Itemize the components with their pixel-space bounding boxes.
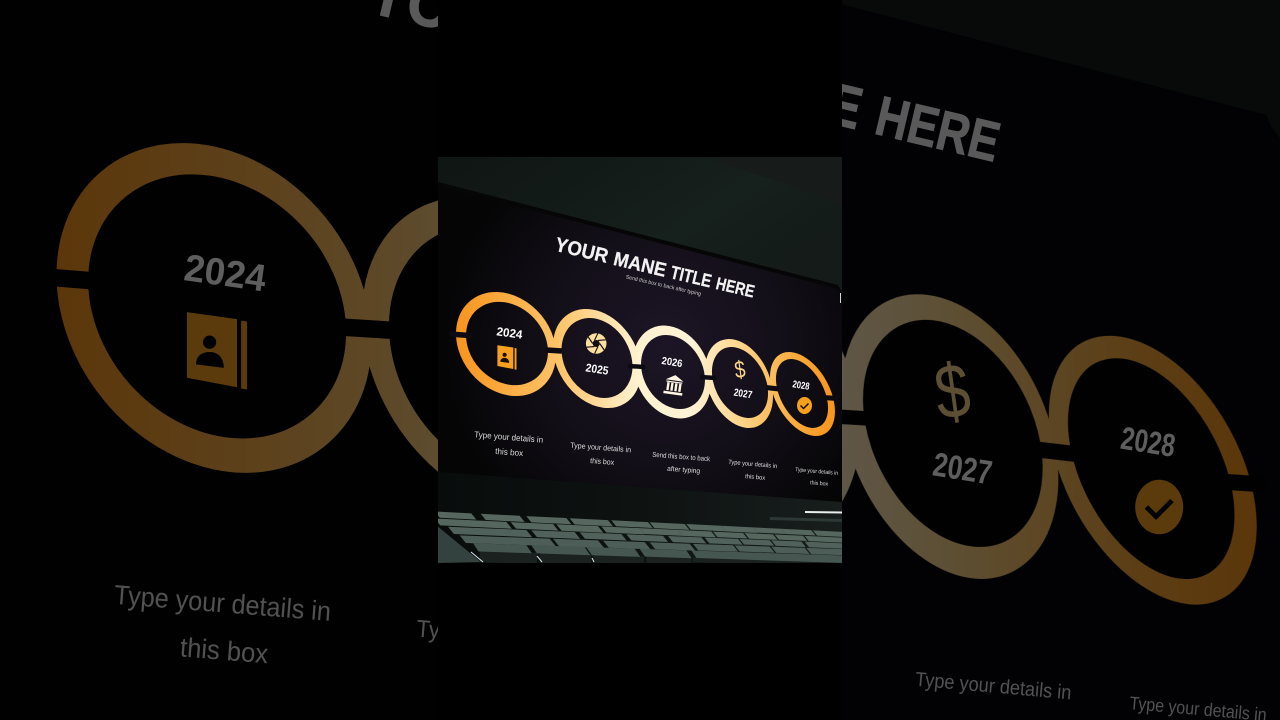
year 2027: 2027 [733, 387, 753, 401]
screen [490, 213, 842, 496]
icon: check badge [797, 397, 812, 414]
bezel upper right panel [702, 157, 842, 205]
screen edge glint [840, 293, 841, 303]
year 2026: 2026 [661, 355, 683, 370]
detail text 4: Type your details in [728, 459, 778, 470]
detail text 2: this box [590, 456, 615, 467]
detail text 1: this box [495, 446, 524, 458]
title: YOUR [553, 234, 611, 268]
panel: blurred enlarged left background [56, 0, 438, 664]
subtitle: Send this box to back after typing [625, 274, 701, 298]
title: MANE [611, 248, 668, 282]
panel: blurred enlarged right background: TITLE [724, 46, 869, 142]
year 2025: 2025 [585, 362, 610, 378]
detail text 3: after typing [667, 466, 700, 475]
panel: blurred enlarged right background: Type your details in [914, 669, 1072, 704]
icon: camera aperture [586, 333, 606, 354]
year 2028: 2028 [792, 379, 810, 393]
panel: blurred enlarged right background: $ [929, 346, 975, 436]
keyboard white edge glints [471, 552, 594, 562]
title: TITLE [669, 261, 714, 291]
detail text 3 [652, 452, 711, 475]
panel: blurred enlarged right background: 2028 [1118, 420, 1178, 464]
detail text 5: Type your details in [795, 467, 838, 477]
laptop top bezel [438, 157, 842, 292]
icon: dollar sign: $ [733, 355, 747, 384]
detail text 1: Type your details in [474, 429, 544, 445]
detail text 4: this box [745, 473, 766, 482]
icon: contact book [497, 345, 516, 370]
detail text 5 [795, 467, 838, 488]
panel: blurred enlarged left background: 2024 [182, 247, 269, 300]
panel: blurred enlarged left background: Type your details in [415, 615, 609, 658]
detail text 4 [728, 460, 777, 480]
panel: central laptop photo [430, 157, 850, 574]
rings [456, 292, 835, 436]
laptop lower deck [496, 477, 842, 563]
detail text 2: Type your details in [570, 441, 631, 454]
panel: blurred enlarged left background: this box [179, 631, 270, 669]
keyboard [438, 512, 842, 563]
panel: blurred enlarged left background: Type your details in [113, 579, 332, 627]
panel: blurred enlarged right background: HERE [870, 84, 1006, 174]
ring interiors [466, 302, 828, 428]
keyboard left corner [438, 527, 481, 563]
ring gaps [450, 334, 838, 398]
icon: bank building [663, 374, 685, 396]
detail text 2 [570, 442, 631, 465]
detail text 1 [474, 431, 543, 456]
title: HERE [714, 273, 757, 302]
detail text 5: this box [810, 480, 828, 488]
panel: blurred enlarged right background: 2027 [930, 447, 995, 492]
detail text 3: Send this box to back [652, 452, 711, 463]
year 2024: 2024 [496, 324, 524, 342]
deck soft reflection [770, 517, 842, 522]
panel: blurred enlarged right background [842, 0, 1280, 720]
deck white reflection [805, 511, 842, 514]
title [557, 237, 756, 298]
